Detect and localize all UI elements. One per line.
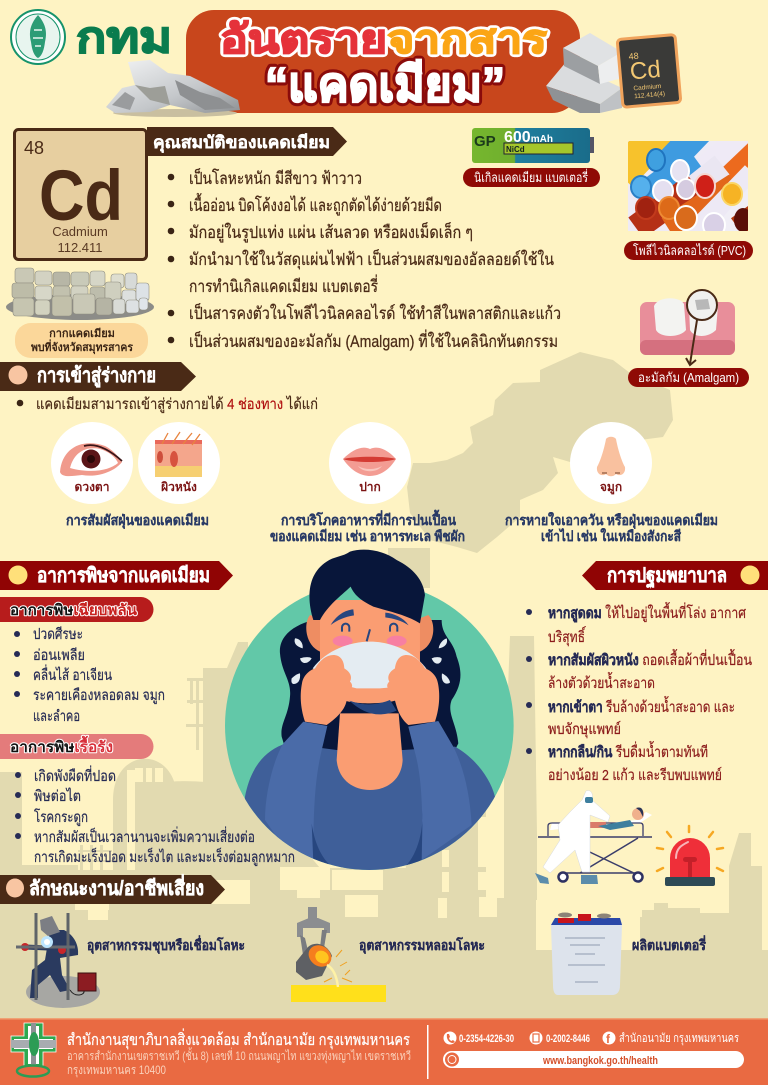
icon: eye: [51, 422, 133, 504]
list: first aid: พบจักษุแพทย์: [548, 721, 621, 739]
footer address line 1: อาคารสำนักงานเขตราชเทวี (ชั้น 8) เลขที่ 10 ถนนพญาไท แขวงทุ่งพญาไท เขตราชเทวี: [67, 1047, 411, 1064]
title line 1: อันตราย จากสาร: [220, 18, 548, 62]
list: first aid: หากเข้าตา รีบล้างด้วยน้ำสะอาด และ: [548, 696, 735, 716]
title line 2: “แคดเมียม”: [265, 59, 505, 112]
text: metal casting: อุตสาหกรรมหลอมโลหะ: [359, 936, 485, 954]
icon: facebook: f: [606, 1032, 611, 1046]
website pill: www.bangkok.go.th/health: [542, 1055, 658, 1067]
icon: nose: จมูก: [600, 480, 622, 495]
text: inhalation route description: เข้าไป เช่น ในเหมืองสังกะสี: [541, 527, 681, 544]
list: properties: เป็นโลหะหนัก มีสีขาว ฟ้าวาว: [189, 167, 362, 188]
list: properties: [168, 167, 561, 351]
list: properties: การทำนิเกิลแคดเมียม แบตเตอรี่: [189, 274, 378, 296]
list: acute symptoms: และลำคอ: [33, 708, 80, 725]
list: chronic symptoms: โรคกระดูก: [34, 808, 88, 826]
list: first aid: หากสัมผัสผิวหนัง ถอดเสื้อผ้าที่ปนเปื้อน: [548, 649, 752, 669]
text: battery production: ผลิตแบตเตอรี่: [632, 935, 706, 953]
background factory and smoke silhouette: [0, 352, 768, 1019]
icon: NiCd battery: 600mAh: [504, 129, 553, 146]
title banner: อันตรายจากสาร: [220, 18, 548, 62]
website pill: [443, 1051, 744, 1068]
bangkok logo seal: [11, 10, 65, 64]
list: properties: เป็นสารคงตัวในโพลีไวนิลคลอไรด์ ใช้ทำสีในพลาสติกและแก้ว: [189, 302, 561, 323]
logo text: กทม: กทม: [76, 14, 172, 61]
caption pill: cadmium sludge: กากแคดเมียม: [49, 327, 115, 340]
subheading: chronic symptoms: อาการพิษเรื้อรัง: [10, 735, 113, 756]
text: routes intro: แคดเมียมสามารถเข้าสู่ร่างกายได้ 4 ช่องทาง ได้แก่: [36, 395, 318, 413]
icon: phone: [444, 1032, 456, 1044]
icon: fax: [530, 1032, 542, 1044]
list: first aid: [526, 602, 752, 784]
list: acute symptoms: ระคายเคืองหลอดลม จมูก: [33, 687, 165, 704]
footer organisation name: สำนักงานสุขาภิบาลสิ่งแวดล้อม สำนักอนามัย กรุงเทพมหานคร: [67, 1028, 410, 1050]
illustration: woman covering mouth with mask: [225, 550, 514, 873]
photo: cadmium sludge bags: [6, 268, 154, 320]
phone number: 0-2354-4226-30: [459, 1033, 514, 1045]
panel: element card Cd: Cd: [39, 157, 123, 236]
title banner: “แคดเมียม”: [265, 59, 505, 112]
footer panel: [0, 1018, 768, 1085]
illustration: medic with stretcher: [535, 790, 652, 884]
list: acute symptoms: [14, 626, 165, 725]
list: chronic symptoms: พิษต่อไต: [34, 787, 81, 805]
list: acute symptoms: อ่อนเพลีย: [33, 647, 85, 664]
text: inhalation route description: การหายใจเอาควัน หรือฝุ่นของแคดเมียม: [505, 511, 718, 529]
caption pill: cadmium sludge: พบที่จังหวัดสมุทรสาคร: [31, 339, 133, 355]
subheading: acute symptoms: อาการพิษเฉียบพลัน: [10, 601, 138, 619]
icon: NiCd battery: NiCd: [506, 145, 525, 154]
heading: routes of entry: การเข้าสู่ร่างกาย: [37, 364, 156, 389]
list: first aid: ล้างตัวด้วยน้ำสะอาด: [548, 672, 655, 692]
cream cutouts: [22, 740, 729, 950]
fax number: 0-2002-8446: [546, 1033, 590, 1045]
list: chronic symptoms: [15, 765, 295, 866]
icon: skin: ผิวหนัง: [161, 480, 197, 494]
heading: toxicity symptoms: [0, 561, 233, 590]
text: inhalation route description: [505, 511, 718, 544]
list: chronic symptoms: หากสัมผัสเป็นเวลานานจะเพิ่มความเสี่ยงต่อ: [34, 826, 255, 846]
icon: raw cadmium metal: [106, 60, 240, 117]
heading: properties: คุณสมบัติของแคดเมียม: [153, 132, 330, 153]
icon: eye: ดวงตา: [75, 480, 109, 494]
caption pill: amalgam: อะมัลกัม (Amalgam): [638, 370, 739, 385]
caption pill: PVC: [624, 241, 753, 260]
heading: first aid: การปฐมพยาบาล: [607, 565, 727, 589]
icon: mouth: [329, 422, 411, 504]
text: oral route description: [270, 509, 465, 544]
list: acute symptoms: คลื่นไส้ อาเจียน: [33, 664, 112, 684]
title banner: [186, 10, 580, 113]
text: oral route description: การบริโภคอาหารที่มีการปนเปื้อน: [281, 509, 456, 528]
text: oral route description: ของแคดเมียม เช่น อาหารทะเล พืชผัก: [270, 528, 465, 544]
list: properties: เป็นส่วนผสมของอะมัลกัม (Amalgam) ที่ใช้ในคลินิกทันตกรรม: [189, 329, 558, 351]
icon: red siren: [657, 826, 723, 886]
list: properties: เนื้ออ่อน บิดโค้งงอได้ และถูกตัดได้ง่ายด้วยมีด: [189, 193, 442, 216]
icon: cadmium element card: Cd: [629, 56, 662, 86]
heading: toxicity symptoms: อาการพิษจากแคดเมียม: [37, 564, 210, 587]
text: skin route description: การสัมผัสฝุ่นของแคดเมียม: [66, 512, 209, 529]
icon: NiCd battery: GP: [474, 133, 496, 150]
list: chronic symptoms: การเกิดมะเร็งปอด มะเร็งไต และมะเร็งต่อมลูกหมาก: [34, 847, 295, 866]
icon: NiCd battery: [472, 128, 594, 163]
panel: element card Cd: 112.411: [57, 240, 103, 255]
list: first aid: อย่างน้อย 2 แก้ว และรีบพบแพทย์: [548, 767, 722, 784]
icon: cadmium element card: [617, 35, 681, 107]
icon: tooth with amalgam filling: [640, 290, 735, 365]
subheading: acute symptoms: [0, 597, 154, 622]
icon: nose: [570, 422, 652, 504]
list: chronic symptoms: เกิดพังผืดที่ปอด: [34, 765, 116, 785]
caption pill: NiCd battery: [463, 168, 600, 187]
panel: element card Cd: [14, 130, 146, 260]
icon: metal casting ladle: [291, 907, 386, 1002]
icon: welder: [16, 913, 100, 1008]
photo: PVC pipes: [628, 141, 748, 231]
heading: properties: [147, 127, 347, 156]
list: acute symptoms: ปวดศีรษะ: [33, 626, 83, 643]
heading: at-risk occupations: [0, 873, 225, 904]
panel: element card Cd: 48: [24, 138, 44, 158]
icon: facebook: [602, 1032, 616, 1046]
footer address line 2: กรุงเทพมหานคร 10400: [67, 1063, 166, 1078]
list: properties: มักนำมาใช้ในวัสดุแผ่นไฟฟ้า เป็นส่วนผสมของอัลลอยด์ใช้ใน: [189, 248, 554, 270]
caption pill: NiCd battery: นิเกิลแคดเมียม แบตเตอรี่: [474, 169, 588, 185]
heading: at-risk occupations: ลักษณะงาน/อาชีพเสี่ยง: [29, 873, 204, 900]
icon: silver ingots: [546, 33, 622, 113]
text: plating or welding: อุตสาหกรรมชุบหรือเชื่อมโลหะ: [87, 935, 245, 954]
list: properties: มักอยู่ในรูปแท่ง แผ่น เส้นลวด หรือผงเม็ดเล็ก ๆ: [189, 221, 473, 243]
panel: element card Cd: Cadmium: [52, 224, 108, 239]
subheading: chronic symptoms: [0, 734, 154, 759]
icon: mouth: ปาก: [359, 480, 381, 494]
logo: health department cross: [11, 1023, 56, 1076]
icon: cadmium element card: 48: [628, 51, 639, 62]
heading: first aid: [582, 561, 768, 590]
icon: industrial battery: [551, 912, 622, 995]
list: first aid: หากกลืน/กิน รีบดื่มน้ำตามทันที: [548, 741, 708, 761]
caption pill: cadmium sludge: [15, 323, 148, 358]
icon: skin: [138, 422, 220, 504]
list: first aid: บริสุทธิ์: [548, 626, 586, 647]
icon: cadmium element card: 112.414(4): [634, 91, 665, 100]
icon: cadmium element card: Cadmium: [633, 83, 662, 92]
heading: routes of entry: [0, 362, 196, 391]
